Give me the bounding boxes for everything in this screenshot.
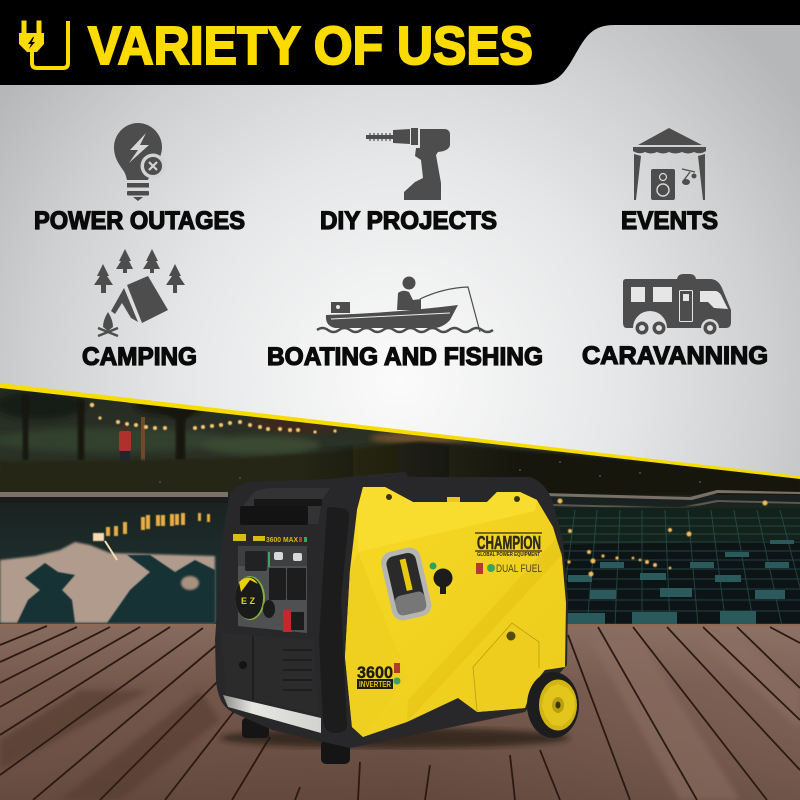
label: DIY PROJECTS	[320, 207, 497, 235]
label: POWER OUTAGES	[34, 207, 245, 235]
person in red	[119, 425, 131, 461]
icon: tent, trees and campfire	[94, 249, 185, 336]
icon: light bulb	[114, 123, 166, 201]
dual fuel badge: DUAL FUEL	[496, 563, 542, 575]
3600 inverter badge: INVERTER	[359, 680, 391, 689]
photo: evening poolside scene	[0, 385, 800, 800]
feet	[242, 718, 269, 738]
header banner	[0, 0, 800, 85]
label: BOATING AND FISHING	[267, 343, 543, 371]
silver base strip	[223, 695, 321, 733]
plank gaps	[0, 626, 800, 800]
title: VARIETY OF USES	[88, 16, 533, 76]
yellow side panel	[345, 487, 566, 737]
wheel	[527, 672, 579, 738]
icon: plug with cord	[19, 21, 68, 68]
panel shading facets	[357, 487, 537, 552]
Champion logo	[475, 533, 542, 558]
string lights	[90, 403, 337, 434]
lower vent panel	[222, 633, 318, 714]
control panel: E Z	[241, 596, 256, 606]
tree line	[0, 385, 800, 495]
Champion logo: CHAMPION	[477, 533, 541, 553]
item: caravanning	[582, 274, 768, 370]
control panel	[235, 546, 307, 633]
wooden deck	[0, 625, 800, 800]
pool	[0, 495, 800, 626]
black housing	[215, 472, 568, 748]
ground shadow	[220, 728, 570, 748]
fuel port	[430, 562, 452, 594]
3600 inverter badge	[357, 663, 400, 689]
icon: person fishing in a boat	[317, 276, 493, 332]
icon: gazebo with speaker and music	[633, 128, 706, 200]
3600 inverter badge: 3600	[357, 663, 393, 682]
label: CAMPING	[82, 343, 197, 371]
plank shading	[0, 669, 796, 800]
icon: cordless drill	[366, 128, 450, 200]
item: power outages	[34, 123, 245, 235]
Champion logo: GLOBAL POWER EQUIPMENT	[477, 552, 540, 558]
item: camping	[82, 249, 197, 371]
item: boating and fishing	[267, 276, 543, 371]
pool coping	[0, 492, 228, 497]
handle recess	[240, 488, 330, 524]
hedge	[0, 440, 616, 482]
tree reflections	[17, 555, 215, 623]
black side pillar	[319, 507, 349, 733]
fuel selector window	[379, 545, 434, 623]
dual fuel badge	[476, 563, 542, 575]
item: DIY projects	[320, 128, 497, 235]
label: EVENTS	[621, 207, 718, 235]
icon: motorhome	[623, 274, 731, 334]
front label strip: 3600 MAX	[266, 537, 298, 544]
label: CARAVANNING	[582, 342, 768, 370]
pool right tiles	[555, 498, 800, 626]
lights reflection	[93, 513, 210, 541]
front label strip	[233, 534, 307, 544]
sky reflection	[0, 542, 215, 623]
item: events	[621, 128, 718, 235]
diagonal panel edge: yellow stripe	[0, 383, 800, 479]
generator product	[215, 472, 579, 764]
grey background panel	[0, 0, 800, 490]
